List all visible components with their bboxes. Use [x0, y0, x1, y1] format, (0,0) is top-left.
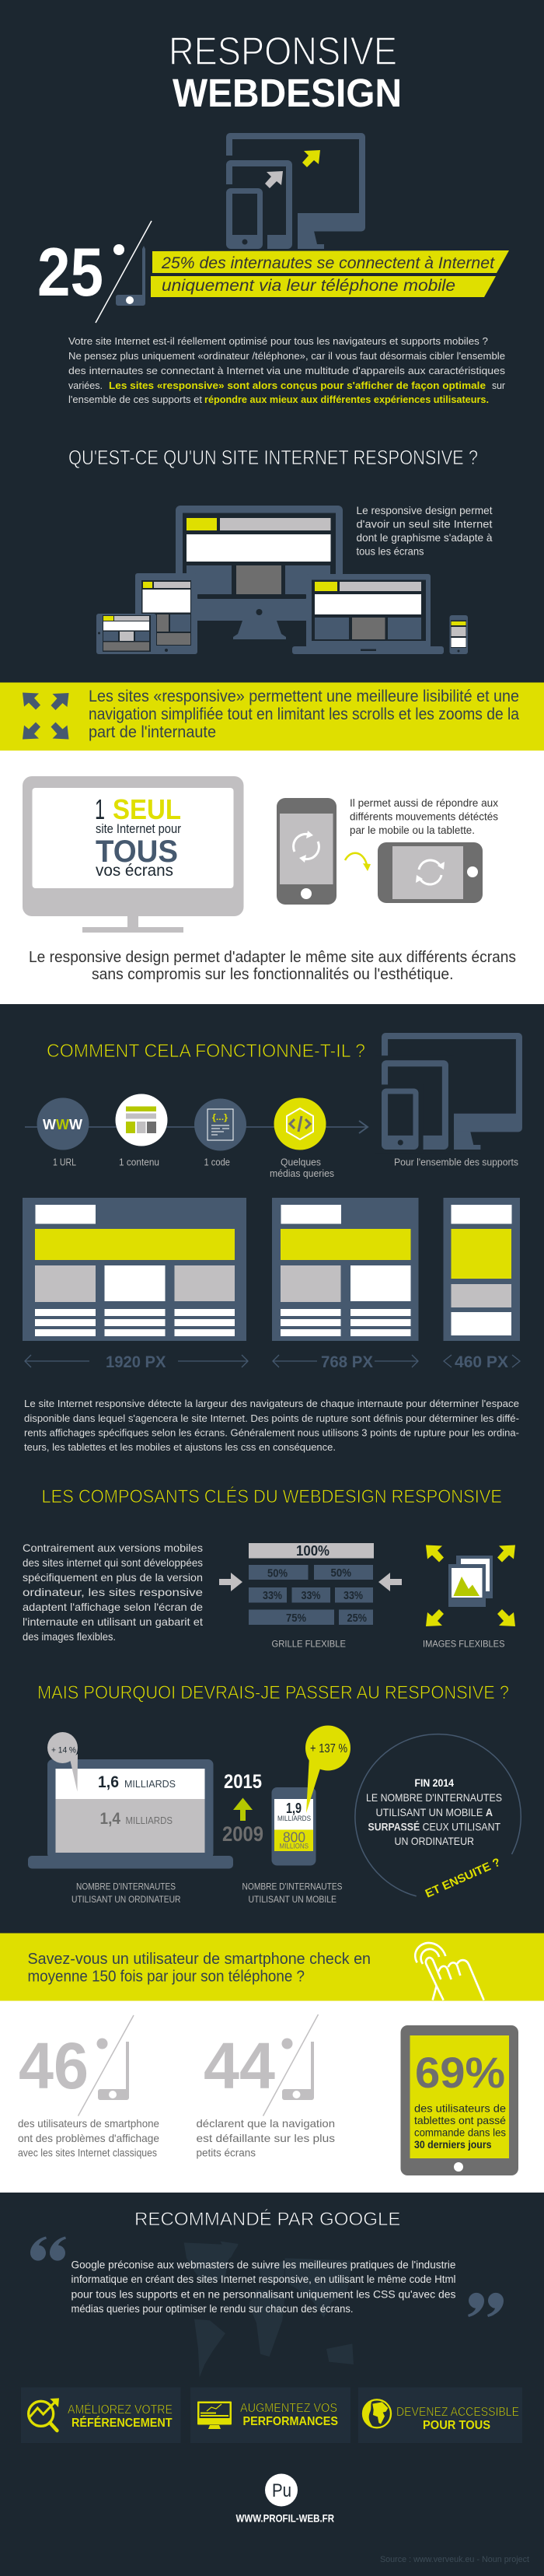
labels: breakpoint widths: 1920 PX — [106, 1353, 166, 1371]
stat: 46 percent: 46 — [19, 2029, 89, 2102]
chart: flexible grid: 50% — [267, 1566, 288, 1580]
icon: big grey monitor with message: site Internet pour — [96, 821, 181, 836]
text: readability: part de l'internaute — [89, 723, 216, 741]
source line: Source : www.verveuk.eu - Noun project — [380, 2555, 529, 2564]
stat: 25 percent with phone slash — [37, 221, 152, 323]
panel: increase performance — [190, 2388, 350, 2443]
text: readability: Les sites «responsive» permettent une meilleure lisibilité et une — [89, 688, 519, 705]
chart: computer users laptop: 1,6 — [98, 1773, 119, 1791]
icon: tablet portrait — [135, 573, 197, 654]
intro text block: Ne pensez plus uniquement «ordinateur /téléphone», car il vous faut désormais cibler l'ensemble — [68, 350, 505, 362]
labels: breakpoint widths — [25, 1353, 520, 1371]
stat: 44 percent: 44 — [204, 2029, 275, 2102]
chart: computer users laptop: MILLIARDS — [126, 1815, 173, 1826]
icon: code document — [194, 1098, 246, 1151]
text: components explanation: l'internaute en utilisant un gabarit et — [23, 1615, 203, 1628]
callout: end 2014 circle — [355, 1734, 521, 1901]
icon: magnifier chart — [29, 2398, 59, 2431]
text: same site across screens: Le responsive design permet d'adapter le même site aux différents écrans — [29, 949, 516, 966]
stat: 69 percent tablet: 30 derniers jours — [414, 2138, 492, 2151]
icon: landscape phone with rotation — [378, 842, 483, 903]
wireframe: tablet layout — [272, 1198, 418, 1341]
chart: mobile users phone — [272, 1725, 350, 1865]
callout: end 2014 circle: UTILISANT UN MOBILE A — [376, 1806, 493, 1818]
chart: flexible grid: 50% — [331, 1566, 351, 1580]
text: components explanation: spécifiquement en plus de la version — [23, 1571, 203, 1584]
text: components explanation: des images flexibles. — [23, 1630, 116, 1643]
text: 44 percent caption: déclarent que la navigation — [196, 2117, 335, 2130]
text: breakpoints explanation: rents affichages spécifiques selon les écrans. Généralement nous utilisons 3 points de rupture pour les ordina- — [24, 1426, 519, 1439]
wireframe: desktop layout — [23, 1198, 246, 1341]
labels: process steps: 1 code — [204, 1156, 230, 1168]
chart: flexible grid: 33% — [302, 1589, 320, 1602]
icon: portrait phone with rotation — [277, 798, 337, 905]
text: 46 percent caption: ont des problèmes d'affichage — [18, 2132, 159, 2144]
text: movements: par le mobile ou la tablette. — [350, 824, 475, 836]
map: faint world map — [184, 2242, 354, 2378]
icon: globe — [363, 2399, 391, 2427]
text: google quote — [71, 2259, 456, 2315]
text: components explanation: des sites internet qui sont développées — [23, 1556, 203, 1569]
arrows: grid squeeze — [219, 1573, 402, 1591]
icon: www: W — [43, 1117, 56, 1132]
intro text block — [68, 335, 506, 405]
chart: mobile users phone: MILLIONS — [280, 1842, 309, 1850]
icon: www — [37, 1098, 89, 1150]
text: breakpoints explanation: disponible dans lequel s'agencera le site Internet. Des points de rupture sont définis pour déterminer les diffé- — [24, 1412, 519, 1424]
text: breakpoints explanation: Le site Internet responsive détecte la largeur des navigateurs de chaque internaute pour déterminer l'espace — [24, 1398, 519, 1409]
callout: yellow banners — [151, 250, 509, 297]
text: 46 percent caption — [18, 2117, 159, 2159]
labels: breakpoint widths: 460 PX — [455, 1353, 508, 1371]
panel: yellow smartphone band: Savez-vous un utilisateur de smartphone check en — [28, 1951, 371, 1968]
heading: why go responsive: MAIS POURQUOI DEVRAIS-JE PASSER AU RESPONSIVE ? — [37, 1682, 509, 1703]
heading: what is a responsive site: QU'EST-CE QU'UN SITE INTERNET RESPONSIVE ? — [68, 446, 478, 469]
stat: 69 percent tablet: tablettes ont passé — [414, 2114, 506, 2126]
panel: improve ranking: RÉFÉRENCEMENT — [71, 2415, 173, 2430]
title: WEBDESIGN — [173, 71, 402, 115]
heading: recommended by google: RECOMMANDÉ PAR GOOGLE — [134, 2209, 401, 2230]
labels: process steps — [53, 1156, 518, 1179]
stat: 69 percent tablet — [401, 2025, 518, 2175]
text: same site across screens: sans compromis sur les fonctionnalités ou l'esthétique. — [92, 966, 454, 983]
intro text block: Les sites «responsive» sont alors conçus pour s'afficher de façon optimale — [109, 380, 486, 391]
labels: internet users: UTILISANT UN MOBILE — [249, 1894, 337, 1905]
panel: become accessible: POUR TOUS — [423, 2419, 490, 2432]
labels: process steps: Pour l'ensemble des supports — [394, 1156, 518, 1168]
chart: computer users laptop — [28, 1732, 233, 1868]
icon: big grey monitor with message: vos écrans — [96, 862, 173, 880]
chart: flexible grid: 25% — [347, 1612, 367, 1625]
icon: monitor chart — [197, 2402, 232, 2429]
icon: four expanding arrows — [23, 692, 68, 739]
chart: flexible grid: 33% — [263, 1589, 282, 1602]
labels: internet users: NOMBRE D'INTERNAUTES — [76, 1881, 176, 1892]
labels: internet users — [71, 1881, 342, 1905]
icon: phone — [449, 615, 468, 654]
icon: monitor, tablet and phone — [220, 133, 365, 253]
labels: process steps: Quelques — [281, 1156, 321, 1168]
heading: key components: LES COMPOSANTS CLÉS DU WEBDESIGN RESPONSIVE — [42, 1486, 502, 1507]
panel: become accessible — [358, 2388, 522, 2443]
chart: computer users laptop: MILLIARDS — [124, 1778, 176, 1790]
chart: mobile users phone: 800 — [283, 1829, 305, 1845]
callout: plus 137 percent: + 137 % — [310, 1742, 347, 1755]
text: google quote: Google préconise aux webmasters de suivre les meilleures pratiques de l'industrie — [71, 2259, 455, 2271]
panel: become accessible: DEVENEZ ACCESSIBLE — [396, 2406, 519, 2419]
labels: grid and images: GRILLE FLEXIBLE — [272, 1638, 346, 1649]
title: RESPONSIVE — [169, 29, 397, 73]
chart: mobile users phone: 1,9 — [286, 1801, 302, 1816]
text: same site across screens — [29, 949, 516, 983]
diagram: process line — [25, 1094, 368, 1151]
chart: flexible grid: 33% — [343, 1589, 363, 1602]
panel: improve ranking — [21, 2388, 180, 2443]
stat: 69 percent tablet: commande dans les — [414, 2126, 506, 2139]
panel: yellow smartphone band: moyenne 150 fois par jour son téléphone ? — [28, 1968, 305, 1985]
text: breakpoints explanation: teurs, les tablettes et les mobiles et ajustons les css en conséquence. — [24, 1441, 336, 1453]
years: 2009 to 2015: 2009 — [222, 1822, 263, 1846]
icon: touching hand — [415, 1943, 484, 2000]
intro text block: sur — [492, 380, 506, 391]
logo: profil web — [236, 2473, 334, 2525]
callout: end 2014 circle: ET ENSUITE ? — [424, 1856, 503, 1901]
callout: plus 14 percent — [47, 1732, 78, 1792]
text: responsive definition: tous les écrans — [356, 544, 424, 557]
panel: yellow smartphone band — [0, 1934, 544, 2000]
stat: 46 percent — [19, 2015, 134, 2116]
illustration: responsive devices — [96, 506, 468, 654]
stat: 44 percent — [204, 2014, 319, 2116]
icon: opening quote — [30, 2237, 66, 2261]
text: movements — [350, 796, 498, 836]
text: responsive definition: dont le graphisme s'adapte à — [356, 531, 493, 544]
labels: process steps: médias queries — [270, 1167, 334, 1179]
text: 46 percent caption: avec les sites Internet classiques — [18, 2147, 157, 2159]
callout: end 2014 circle: SURPASSÉ CEUX UTILISANT — [368, 1820, 500, 1832]
chart: computer users laptop: 1,4 — [99, 1810, 120, 1828]
chart: flexible grid — [249, 1543, 374, 1625]
labels: internet users: NOMBRE D'INTERNAUTES — [242, 1881, 342, 1892]
icon: flexible images — [426, 1545, 515, 1626]
text: google quote: informatique en créant des sites Internet responsive, en utilisant le même code Html — [71, 2273, 455, 2285]
icon: media queries — [274, 1098, 326, 1150]
text: responsive definition: d'avoir un seul site Internet — [356, 518, 493, 530]
icon: content — [115, 1094, 168, 1146]
labels: process steps: 1 contenu — [119, 1156, 159, 1168]
chart: flexible grid: 100% — [296, 1543, 330, 1559]
text: breakpoints explanation — [24, 1398, 519, 1453]
text: components explanation: adaptent l'affichage selon l'écran de — [23, 1601, 203, 1613]
icon: devices large — [375, 1033, 522, 1153]
chart: flexible grid: 75% — [286, 1612, 306, 1625]
icon: desktop computer — [176, 506, 343, 639]
callout: plus 14 percent: + 14 % — [51, 1745, 76, 1755]
callout: yellow banners: 25% des internautes se connectent à Internet — [161, 254, 495, 272]
wireframe: mobile layout — [443, 1198, 520, 1341]
icon: big grey monitor with message: TOUS — [96, 835, 178, 869]
text: google quote: médias queries pour optimiser le rendu sur chacun des écrans. — [71, 2303, 353, 2315]
icon: big grey monitor with message: SEUL — [113, 793, 181, 825]
arrow: rotation — [345, 853, 371, 871]
callout: end 2014 circle: UN ORDINATEUR — [395, 1835, 474, 1847]
labels: breakpoint widths: 768 PX — [321, 1353, 373, 1371]
text: google quote: pour tous les supports et en ne personnalisant uniquement les CSS qu'avec des — [71, 2288, 456, 2301]
icon: big grey monitor with message: 1 — [95, 793, 105, 825]
icon: www: W — [56, 1117, 69, 1132]
chart: mobile users phone: MILLIARDS — [277, 1815, 311, 1822]
text: responsive definition: Le responsive design permet — [356, 504, 493, 516]
panel: improve ranking: AMÉLIOREZ VOTRE — [68, 2402, 173, 2417]
icon: laptop — [292, 574, 444, 654]
text: components explanation: ordinateur, les sites responsive — [23, 1586, 203, 1598]
text: 44 percent caption: est défaillante sur les plus — [196, 2132, 335, 2144]
text: 46 percent caption: des utilisateurs de smartphone — [18, 2117, 159, 2130]
panel: yellow readability band — [0, 683, 544, 751]
icon: www: W — [69, 1117, 82, 1132]
labels: grid and images: IMAGES FLEXIBLES — [423, 1638, 505, 1649]
text: 44 percent caption: petits écrans — [196, 2147, 256, 2159]
intro text block: variées. — [68, 380, 103, 391]
years: 2009 to 2015: 2015 — [224, 1771, 262, 1793]
labels: internet users: UTILISANT UN ORDINATEUR — [71, 1894, 181, 1905]
icon: big grey monitor with message — [23, 776, 244, 933]
text: movements: Il permet aussi de répondre aux — [350, 796, 498, 809]
callout: yellow banners: uniquement via leur téléphone mobile — [162, 277, 455, 295]
years: 2009 to 2015 — [222, 1771, 263, 1846]
intro text block: répondre aux mieux aux différentes expériences utilisateurs. — [204, 394, 489, 405]
text: responsive definition — [356, 504, 493, 557]
logo: profil web: Pu — [272, 2480, 291, 2501]
panel: white section one site — [0, 751, 544, 1004]
icon: small tablet landscape — [96, 614, 156, 654]
callout: plus 137 percent — [305, 1725, 350, 1813]
icon: closing quote — [468, 2293, 504, 2317]
stat: 25 percent with phone slash: 25 — [37, 233, 103, 310]
text: components explanation — [23, 1542, 203, 1643]
labels: process steps: 1 URL — [53, 1156, 76, 1168]
heading: how it works: COMMENT CELA FONCTIONNE-T-IL ? — [47, 1041, 365, 1062]
text: 44 percent caption — [196, 2117, 335, 2159]
intro text block: l'ensemble de ces supports et — [68, 394, 202, 405]
text: readability — [89, 688, 519, 741]
stat: 69 percent tablet: 69% — [415, 2048, 505, 2097]
intro text block: Votre site Internet est-il réellement optimisé pour tous les navigateurs et supports mobiles ? — [68, 335, 488, 347]
stat: 69 percent tablet: des utilisateurs de — [414, 2102, 506, 2114]
callout: end 2014 circle: LE NOMBRE D'INTERNAUTES — [366, 1791, 502, 1804]
title — [169, 29, 402, 115]
labels: grid and images — [272, 1638, 505, 1649]
icon: code document: {...} — [212, 1113, 228, 1122]
panel: increase performance: PERFORMANCES — [242, 2415, 338, 2428]
callout: end 2014 circle: FIN 2014 — [415, 1776, 454, 1789]
text: components explanation: Contrairement aux versions mobiles — [23, 1542, 203, 1554]
panel: white statistics — [0, 2000, 544, 2193]
panel: increase performance: AUGMENTEZ VOS — [240, 2402, 337, 2415]
text: movements: différents mouvements détéctés — [350, 810, 498, 823]
intro text block: des internautes se connectant à Internet via une multitude d'appareils aux caractéristiques — [68, 365, 506, 376]
logo: profil web: WWW.PROFIL-WEB.FR — [236, 2512, 334, 2525]
